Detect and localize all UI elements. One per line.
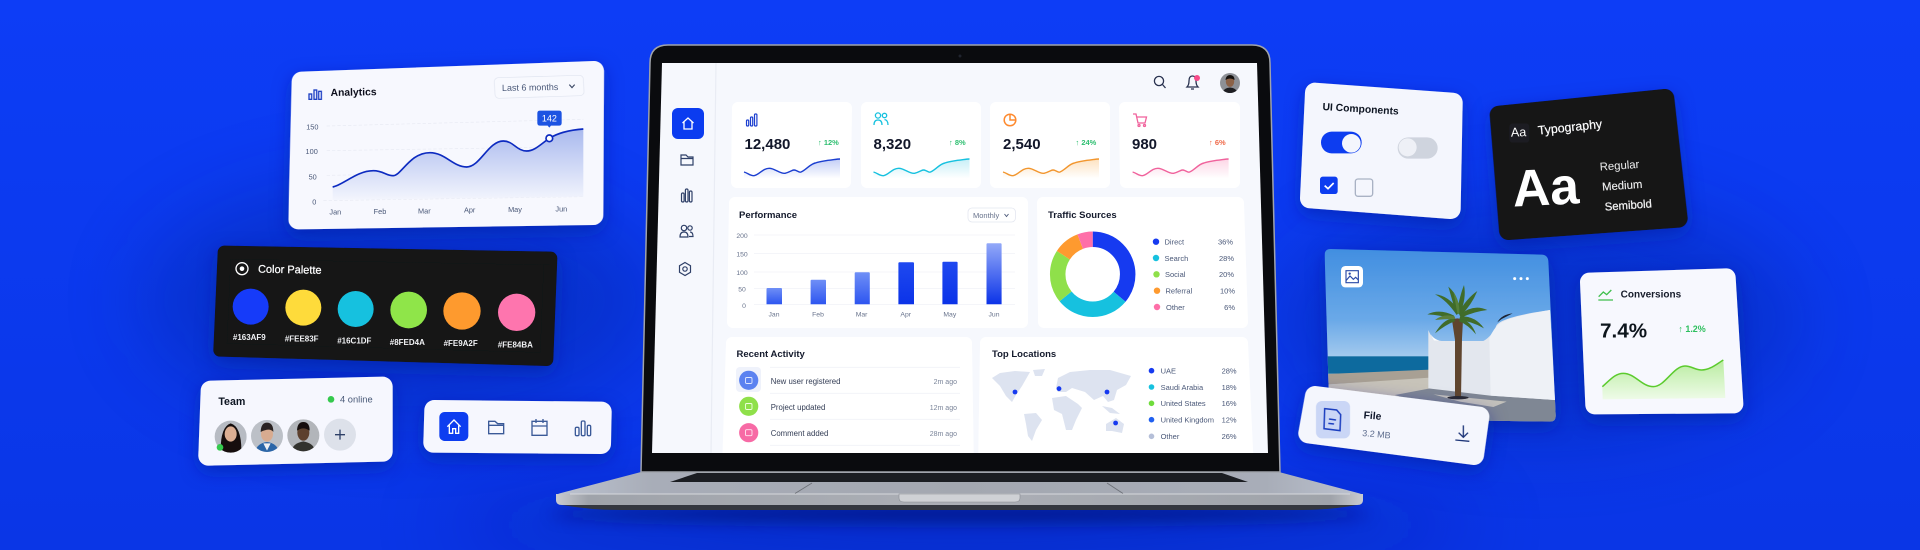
line chart: analytics: Apr <box>464 206 476 215</box>
panel: top locations: Top Locations <box>992 349 1056 360</box>
add member button <box>324 419 356 451</box>
locations legend: Saudi Arabia <box>1161 383 1204 392</box>
laptop screen <box>640 60 1280 470</box>
panel: traffic sources <box>1043 203 1242 322</box>
panel: traffic sources: Traffic Sources <box>1048 210 1117 221</box>
locations legend: Other <box>1161 432 1180 441</box>
swatches: #FE9A2F <box>444 339 478 348</box>
panel: navigation bar <box>433 410 602 444</box>
swatches: #FE84BA <box>498 340 533 349</box>
panel: performance chart: Feb <box>812 312 824 318</box>
range selector: Last 6 months <box>502 82 559 93</box>
locations legend: United Kingdom <box>1161 416 1214 424</box>
checkbox checked <box>1320 177 1338 194</box>
line chart: analytics: Feb <box>374 207 386 216</box>
line chart: analytics: 0 <box>312 197 316 206</box>
menu dots <box>1513 277 1529 280</box>
donut legend: 28% <box>1219 254 1234 263</box>
big value: 7.4% <box>1600 319 1647 342</box>
avatars <box>213 419 320 453</box>
small glyph <box>1509 123 1529 143</box>
panel: performance chart: 150 <box>736 252 748 258</box>
laptop lid <box>641 45 1280 472</box>
icon: trend <box>1598 290 1613 300</box>
line chart: analytics: Jun <box>555 204 567 213</box>
kpi card: 12,480: ↑ 12% <box>818 138 839 147</box>
icon: download <box>1455 425 1469 441</box>
kpi card: 2,540: 2,540 <box>1003 136 1041 153</box>
range selector <box>498 79 580 94</box>
panel: recent activity: 2m ago <box>934 379 957 386</box>
checkbox empty <box>1355 179 1373 196</box>
panel: recent activity: Comment added <box>771 429 828 438</box>
panel: team <box>208 387 383 456</box>
panel: performance chart <box>733 203 1022 322</box>
line chart: analytics: 150 <box>306 122 318 131</box>
panel: typography <box>1499 98 1678 231</box>
panel: performance chart: 50 <box>738 286 746 294</box>
panel: performance chart: Mar <box>856 312 868 318</box>
heading: team: Team <box>218 396 245 408</box>
icon: home button <box>439 412 468 441</box>
weights: Medium <box>1602 179 1643 194</box>
top bar icons <box>1154 72 1241 94</box>
line chart: analytics: May <box>508 205 522 214</box>
weights: Semibold <box>1604 198 1652 214</box>
weights: Regular <box>1599 159 1640 174</box>
kpi card: 980 <box>1125 108 1234 182</box>
swatches: #163AF9 <box>233 333 266 342</box>
kpi card: 8,320 <box>867 108 975 182</box>
panel: recent activity: 28m ago <box>930 431 957 438</box>
locations legend: 18% <box>1222 383 1237 392</box>
panel: file card <box>1308 396 1479 455</box>
donut chart <box>1058 239 1128 309</box>
locations legend: United States <box>1161 399 1206 408</box>
panel: top locations <box>984 343 1248 470</box>
line chart: analytics: 142 <box>542 113 557 123</box>
kpi card: 8,320: ↑ 8% <box>949 138 966 147</box>
swatches: #FEE83F <box>285 335 319 344</box>
donut legend: Social <box>1165 270 1186 279</box>
panel: performance chart: 200 <box>736 233 748 240</box>
panel: conversions <box>1589 278 1734 405</box>
toggle on <box>1321 132 1362 153</box>
icon: folder <box>489 421 504 434</box>
panel: performance chart: May <box>943 312 957 318</box>
palm tree <box>1427 285 1487 399</box>
icon: calendar <box>532 419 547 435</box>
icon: analytics bars <box>309 90 321 99</box>
panel: analytics card <box>298 71 594 219</box>
donut legend: Search <box>1164 254 1188 263</box>
locations legend: UAE <box>1161 366 1176 376</box>
donut legend: 10% <box>1220 286 1235 296</box>
donut legend: 20% <box>1219 270 1234 279</box>
swatches <box>233 289 535 349</box>
panel: recent activity: Recent Activity <box>736 349 805 360</box>
kpi card: 8,320: 8,320 <box>874 136 911 153</box>
small glyph: Aa <box>1511 125 1528 140</box>
big glyph: Aa <box>1511 157 1581 219</box>
panel: performance chart: Monthly <box>973 211 1000 220</box>
icon: image tile <box>1341 266 1363 287</box>
line chart: analytics: 100 <box>306 147 318 156</box>
icon: palette <box>236 263 248 275</box>
line chart: analytics <box>306 111 583 216</box>
area chart <box>1602 360 1725 399</box>
file size: 3.2 MB <box>1362 428 1391 440</box>
online status: 4 online <box>340 395 373 405</box>
panel: recent activity <box>728 343 968 470</box>
camera <box>958 54 962 58</box>
icon: document <box>1316 401 1350 438</box>
locations legend: 12% <box>1222 416 1237 424</box>
locations legend: 16% <box>1222 399 1237 408</box>
weights <box>1599 159 1652 214</box>
donut legend <box>1153 238 1235 312</box>
panel: performance chart: Apr <box>900 312 912 318</box>
swatches: #16C1DF <box>337 336 372 345</box>
panel: performance chart: Jun <box>989 312 1000 318</box>
donut legend: Direct <box>1164 238 1185 246</box>
heading: typography: Typography <box>1537 117 1604 138</box>
donut legend: Referral <box>1166 286 1193 296</box>
sidebar icons <box>672 108 704 276</box>
line chart: analytics: 50 <box>309 172 317 181</box>
delta: ↑ 1.2% <box>1678 324 1706 334</box>
donut legend: 6% <box>1224 303 1235 312</box>
panel: color palette <box>220 252 551 359</box>
panel: recent activity: New user registered <box>771 377 840 386</box>
swatches: #8FED4A <box>390 338 425 347</box>
heading: ui components: UI Components <box>1322 102 1399 118</box>
panel: photo card <box>1320 245 1560 432</box>
panel: performance chart: 0 <box>742 303 746 310</box>
locations legend: 26% <box>1222 432 1237 441</box>
locations legend: 28% <box>1222 366 1237 376</box>
panel: recent activity: Project updated <box>771 403 825 412</box>
laptop <box>556 45 1363 510</box>
donut legend: Other <box>1166 303 1185 312</box>
heading: file: File <box>1363 410 1382 423</box>
donut legend: 36% <box>1218 238 1233 246</box>
panel: performance chart: 100 <box>736 270 748 277</box>
line chart: analytics: Mar <box>418 206 431 215</box>
panel: performance chart: Performance <box>739 210 797 221</box>
world map <box>992 369 1131 441</box>
toggle off <box>1398 137 1438 159</box>
heading: analytics: Analytics <box>331 87 377 99</box>
kpi card: 980: 980 <box>1132 136 1157 153</box>
kpi card: 12,480: 12,480 <box>744 136 790 153</box>
panel: ui components <box>1310 93 1453 209</box>
kpi card: 2,540: ↑ 24% <box>1076 138 1097 147</box>
icon: bars <box>575 421 591 436</box>
heading: conversions: Conversions <box>1621 289 1682 300</box>
panel: performance chart: Jan <box>769 312 780 318</box>
panel: recent activity: 12m ago <box>930 405 957 412</box>
laptop base <box>556 472 1363 510</box>
locations legend <box>1149 366 1237 441</box>
kpi card: 12,480 <box>737 108 846 182</box>
line chart: analytics: Jan <box>329 207 341 216</box>
kpi card: 980: ↑ 6% <box>1209 138 1226 147</box>
kpi card: 2,540 <box>996 108 1104 182</box>
heading: color palette: Color Palette <box>258 264 322 277</box>
